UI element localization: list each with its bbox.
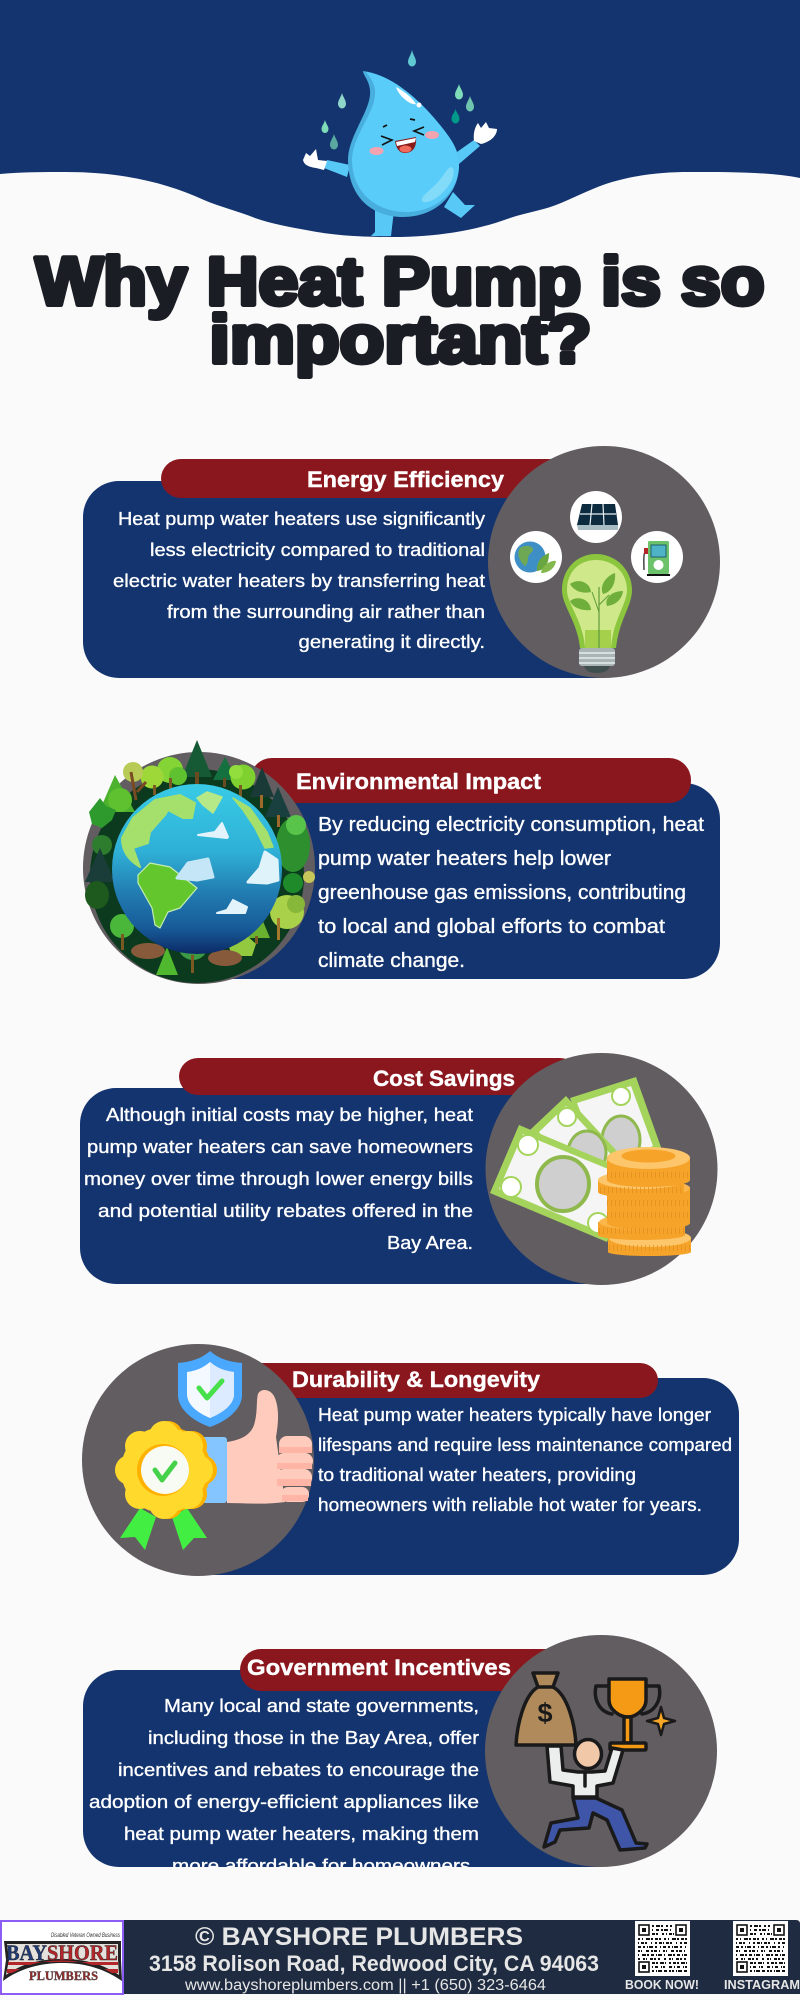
footer band <box>124 1920 800 1994</box>
rosette <box>115 1421 217 1519</box>
icon: banknotes and coins <box>486 1053 718 1285</box>
icon: green fuel pump <box>644 541 670 576</box>
logo: Bayshore Plumbers: PLUMBERS <box>29 1968 98 1983</box>
heading: Durability & Longevity <box>292 1367 541 1392</box>
body text: electric water heaters by transferring heat <box>113 570 485 591</box>
card body <box>198 783 720 979</box>
trees <box>85 740 315 975</box>
body text: Heat pump water heaters typically have longer <box>318 1404 711 1425</box>
body text: heat pump water heaters, making them <box>124 1823 479 1844</box>
panel: durability and longevity <box>82 1344 739 1576</box>
body text: Many local and state governments, <box>164 1695 479 1716</box>
card body <box>80 1088 602 1284</box>
panel: cost savings <box>80 1053 718 1285</box>
header wave <box>0 0 800 237</box>
logo: Bayshore Plumbers <box>1 1921 123 1994</box>
title: Why Heat Pump is so <box>36 244 764 320</box>
card body <box>83 1670 601 1867</box>
right arm <box>457 140 480 164</box>
title: important? <box>210 302 592 378</box>
icon: happy water drop mascot <box>303 50 497 236</box>
money bag <box>516 1673 576 1745</box>
icon: person holding money bag and trophy <box>485 1635 717 1867</box>
body text: less electricity compared to traditional <box>150 539 485 560</box>
hand <box>227 1390 313 1504</box>
panel: energy efficiency <box>83 446 720 678</box>
cuff <box>196 1437 227 1503</box>
body text: more affordable for homeowners. <box>172 1855 476 1876</box>
body text <box>113 508 486 652</box>
company name: © BAYSHORE PLUMBERS <box>195 1923 523 1951</box>
body text <box>318 1404 732 1515</box>
body text: including those in the Bay Area, offer <box>148 1727 479 1748</box>
icon: solar panel <box>577 504 618 530</box>
sparkle <box>647 1707 675 1735</box>
body text: greenhouse gas emissions, contributing <box>318 882 686 904</box>
body text: Bay Area. <box>387 1232 473 1253</box>
address: 3158 Rolison Road, Redwood City, CA 94063 <box>149 1951 599 1976</box>
body text: pump water heaters help lower <box>318 848 611 870</box>
body text: By reducing electricity consumption, heat <box>318 814 704 836</box>
icon: globe with leaves <box>514 542 556 573</box>
arms and shirt <box>547 1746 623 1797</box>
body text <box>318 814 704 972</box>
shield <box>178 1351 242 1427</box>
heading: Government Incentives <box>247 1655 511 1680</box>
head <box>574 1740 602 1768</box>
icon: green energy circle <box>488 446 720 678</box>
dollar sign: $ <box>537 1698 553 1728</box>
body text: lifespans and require less maintenance compared <box>318 1434 732 1455</box>
card body <box>83 481 604 678</box>
heading: Environmental Impact <box>296 769 542 794</box>
heading bar <box>161 459 581 498</box>
QR code: book now <box>635 1921 690 1976</box>
heading bar <box>250 758 691 803</box>
body text: incentives and rebates to encourage the <box>118 1759 479 1780</box>
gloves <box>303 149 327 170</box>
body text <box>84 1104 473 1253</box>
trophy <box>595 1686 660 1714</box>
title <box>36 244 764 378</box>
body text: homeowners with reliable hot water for years. <box>318 1494 702 1515</box>
heading: Energy Efficiency <box>307 467 505 492</box>
QR caption: instagram: INSTAGRAM <box>724 1977 800 1992</box>
icon: light bulb with leaves <box>562 554 632 673</box>
icon: earth surrounded by trees <box>83 740 315 984</box>
body text: Although initial costs may be higher, heat <box>106 1104 473 1125</box>
body text: Heat pump water heaters use significantly <box>118 508 486 529</box>
banknotes <box>490 1077 662 1242</box>
panel: government incentives <box>83 1635 717 1876</box>
trousers <box>544 1798 647 1850</box>
body text: adoption of energy-efficient appliances like <box>89 1791 479 1812</box>
body text: from the surrounding air rather than <box>167 601 485 622</box>
coin stack <box>598 1147 691 1256</box>
panel: environmental impact <box>83 740 720 984</box>
body text: to traditional water heaters, providing <box>318 1464 636 1485</box>
body text: money over time through lower energy bills <box>84 1168 473 1189</box>
left arm <box>324 160 350 177</box>
heading bar <box>240 1649 580 1691</box>
heading bar <box>240 1363 658 1398</box>
QR code: instagram <box>733 1921 788 1976</box>
logo: Bayshore Plumbers: Disabled Veteran Owned Business <box>51 1932 121 1939</box>
heading: Cost Savings <box>373 1066 515 1091</box>
body text <box>89 1695 479 1876</box>
website and phone: www.bayshoreplumbers.com || +1 (650) 323-6464 <box>184 1977 546 1994</box>
body text: pump water heaters can save homeowners <box>87 1136 473 1157</box>
logo: Bayshore Plumbers: BAYSHORE <box>6 1940 118 1965</box>
icon: shield, rosette and thumbs up <box>82 1344 314 1576</box>
body text: to local and global efforts to combat <box>318 916 665 938</box>
QR caption: book now: BOOK NOW! <box>625 1977 699 1992</box>
heading bar <box>179 1058 579 1095</box>
body text: generating it directly. <box>298 631 485 652</box>
globe <box>112 784 282 954</box>
legs <box>371 210 394 236</box>
card body <box>198 1378 739 1575</box>
body text: and potential utility rebates offered in the <box>98 1200 473 1221</box>
body text: climate change. <box>318 950 465 972</box>
ribbons <box>120 1508 156 1550</box>
